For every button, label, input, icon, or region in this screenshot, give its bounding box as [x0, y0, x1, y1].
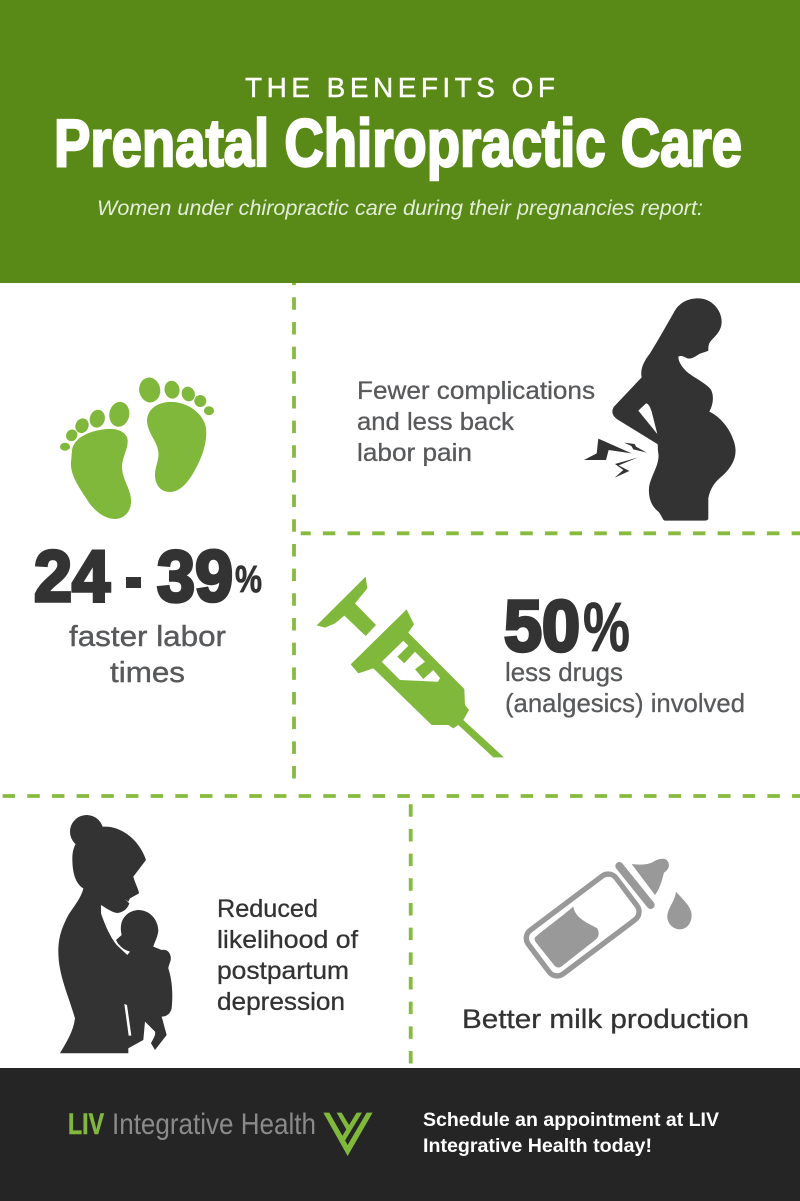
stat: 50% [504, 587, 630, 667]
text: postpartum depression [217, 895, 358, 1016]
logo: LIV Integrative Health: Integrative Health [112, 1108, 316, 1141]
icon: pregnant woman with back pain [584, 298, 736, 521]
text: call to action: Schedule an appointment at LIV [423, 1110, 719, 1131]
icon: syringe [317, 577, 504, 757]
panel: fewer complications [357, 298, 736, 521]
icon: mother and baby [58, 815, 172, 1053]
logo: LIV Integrative Health [68, 1108, 373, 1156]
panel: footer [0, 1068, 800, 1201]
text: fewer complications: and less back [357, 408, 515, 436]
heading: the benefits of: THE BENEFITS OF [245, 72, 555, 103]
icon: baby bottle [522, 859, 692, 980]
text: fewer complications [357, 377, 595, 467]
text: call to action [423, 1110, 719, 1157]
text: faster labor times: faster labor [69, 621, 226, 653]
text: postpartum depression: Reduced [217, 895, 318, 923]
panel: header [0, 0, 800, 283]
panel: postpartum depression [58, 815, 358, 1053]
stat: 24 - 39%: 39 [157, 537, 233, 617]
text: faster labor times [69, 621, 226, 689]
panel: better milk production [462, 859, 749, 1034]
stat: 50%: % [583, 588, 630, 666]
stat: 24 - 39%: 24 [34, 537, 110, 617]
text: postpartum depression: depression [217, 988, 345, 1016]
text: fewer complications: Fewer complications [357, 377, 595, 405]
panel: faster labor times [34, 376, 262, 689]
stat: 50%: 50 [504, 587, 580, 667]
text: postpartum depression: postpartum [217, 957, 349, 985]
icon: baby feet [60, 376, 214, 519]
stat: 24 - 39%: % [235, 559, 262, 601]
text: less drugs: (analgesics) involved [505, 688, 745, 718]
text: fewer complications: labor pain [357, 439, 472, 467]
text: postpartum depression: likelihood of [217, 926, 358, 954]
panel: less drugs [317, 577, 745, 757]
stat: 24 - 39% [34, 537, 262, 617]
subtitle: Women under chiropractic care during their pregnancies report: [97, 197, 703, 220]
text: faster labor times: times [110, 657, 185, 689]
text: less drugs: less drugs [505, 657, 623, 687]
text: call to action: Integrative Health today! [423, 1136, 652, 1157]
text: better milk production: Better milk production [462, 1004, 749, 1034]
text: less drugs [505, 657, 745, 718]
logo: LIV Integrative Health: LIV [68, 1108, 104, 1141]
